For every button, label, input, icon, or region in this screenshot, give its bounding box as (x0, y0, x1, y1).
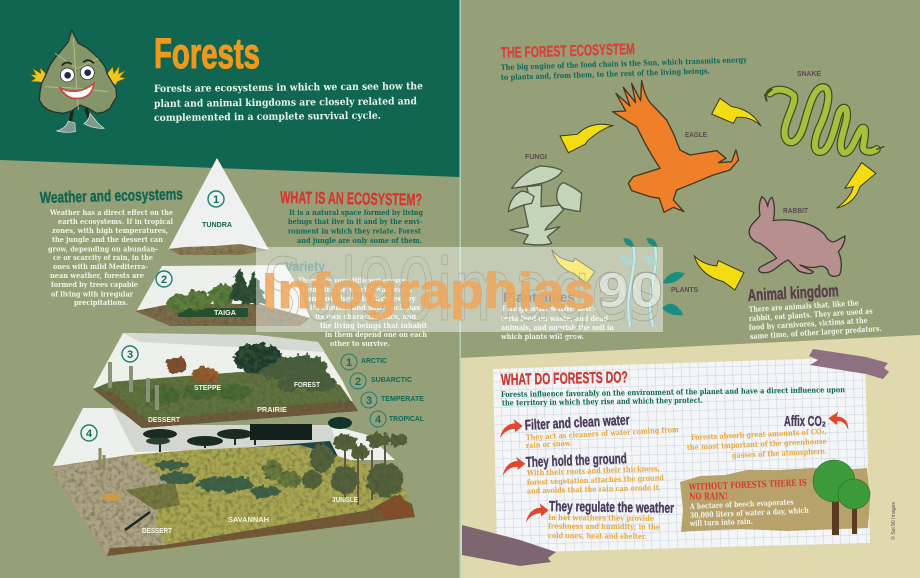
text block: animal kingdom: rabbit, eat plants. They are used as (749, 306, 873, 323)
intro text: complemented in a complete survival cycle. (154, 111, 381, 124)
photo credit: © Sol 90 Images (890, 501, 897, 540)
item: they hold the ground: They hold the ground (526, 451, 627, 471)
watermark overlay: 90 (597, 264, 663, 318)
callout: without forests there is no rain: WITHOUT FORESTS THERE IS (688, 478, 807, 493)
item: affix co2: Affix CO₂ (784, 414, 826, 430)
text block: variety (298, 276, 427, 348)
legend: climate zones: 3 (366, 395, 372, 407)
callout: without forests there is no rain: NO RAIN! (689, 492, 728, 502)
text block: forests influence: the territory in which they rise and which they protect. (502, 396, 703, 407)
text block: variety: the living beings that inhabit (320, 321, 427, 330)
arrow: hold ground (503, 457, 525, 476)
pyramid layer 3: temperate (93, 333, 358, 428)
label eagle: EAGLE (685, 132, 707, 139)
biome labels layer 3: PRAIRIE (257, 407, 287, 414)
circled number 2 (156, 271, 172, 287)
heading: what do forests do: WHAT DO FORESTS DO? (501, 369, 628, 389)
item: filter and clean water: Filter and clean water (524, 413, 630, 434)
text block: food chain intro: The big engine of the food chain is the Sun, which transmits energy (501, 55, 747, 72)
text block: variety: in them depend one on each (325, 330, 427, 339)
legend: climate zones: SUBARCTIC (371, 377, 412, 384)
circled number 4: 4 (86, 428, 93, 440)
text block: weather: formed by trees capable (51, 280, 138, 289)
watermark overlay: Infographias (262, 263, 595, 319)
biome labels layer 4: DESSERT (142, 528, 173, 535)
arrow: eagle to fungi (560, 124, 613, 153)
heading: the forest ecosystem: THE FOREST ECOSYSTEM (501, 41, 635, 62)
arrow: snake to eagle (712, 98, 761, 126)
callout: without forests there is no rain: 30,000 liters of water a day, which (690, 506, 809, 520)
text block: animal kingdom: There are animals that, like the (749, 298, 859, 314)
panel: decomposers text (500, 289, 614, 341)
panel: what is an ecosystem (280, 188, 427, 348)
cream lower band of right page (460, 335, 920, 578)
item: affix co2: the most important of the greenhouse (687, 437, 827, 452)
circled number 4 (81, 425, 97, 441)
torn tape: top right (809, 349, 889, 379)
text block: weather: grow, depending on abundan- (48, 244, 158, 254)
biome labels layer 3: DESSERT (148, 417, 181, 424)
legend: climate zones: 1 (346, 357, 352, 369)
page fold line (460, 0, 461, 578)
text block: weather: precipitations. (74, 298, 128, 307)
icon: trees (813, 460, 870, 535)
text block: variety: other to survive. (330, 339, 390, 348)
text block: ecosystem definition: beings that live in it and by the envi- (288, 217, 422, 226)
legend: climate zones: 2 (355, 376, 361, 388)
text block: food chain intro: to plants and, from them, to the rest of the living beings. (501, 66, 710, 82)
text block: forests influence: Forests influence favorably on the environment of the planet and have a direct influence upon (501, 385, 845, 399)
item: affix co2 (687, 414, 827, 460)
item: they hold the ground: and avoids that the rain can erode it. (527, 483, 661, 495)
item: they regulate the weather (548, 499, 674, 541)
text block: weather: nean weather, forests are (50, 271, 144, 280)
text block: decomposers (500, 304, 614, 341)
icon: rabbit (749, 197, 845, 276)
text block: animal kingdom: same time, of other larger predators. (750, 324, 882, 341)
legend: climate zones: TROPICAL (389, 416, 425, 423)
text block: ecosystem definition (288, 208, 424, 245)
heading: weather and ecosystems: Weather and ecosystems (40, 186, 183, 207)
item: they regulate the weather: They regulate the weather (549, 499, 674, 517)
pyramid layer 4: tropical (50, 408, 415, 556)
icon: eagle (613, 81, 739, 212)
intro text: Forests are ecosystems in which we can see how the (154, 81, 423, 95)
icon: plants (619, 238, 698, 327)
text block: ecosystem definition: ronment in which they relate. Forest (288, 226, 421, 236)
arrow: fungi to plants (552, 249, 595, 283)
text block: weather: zones, with high temperatures, (52, 226, 168, 235)
text block: weather: Weather has a direct effect on the (49, 208, 173, 217)
label taiga: TAIGA (214, 310, 236, 317)
callout: without forests there is no rain (680, 468, 870, 532)
text block: ecosystem definition: and jungle are only some of them. (297, 236, 422, 245)
intro text: plant and animal kingdoms are closely related and (154, 96, 417, 110)
arrow: filter water (500, 419, 523, 438)
text block: weather: ce or scarcity of rain, in the (53, 253, 153, 262)
icon: snake (765, 71, 884, 153)
text block: weather: ones with mild Mediterra- (53, 262, 148, 271)
text block: animal kingdom (749, 298, 882, 341)
text block: weather: earth ecosystems. If in tropical (58, 217, 173, 226)
item: they hold the ground: With their roots and their thickness, (526, 464, 660, 478)
panel: what do forests do (462, 349, 889, 566)
heading: decomposers: Plant allies (503, 289, 575, 305)
label plants: PLANTS (671, 287, 698, 294)
green header band (0, 0, 460, 177)
arrow: plants to rabbit (694, 256, 744, 290)
legend: climate zones (341, 354, 425, 427)
text block: variety: tems in the world, and each (302, 285, 412, 294)
icon: leaf mascot (30, 30, 126, 132)
callout: without forests there is no rain: A hectare of beech evaporates (689, 497, 794, 511)
text block: ecosystem definition: It is a natural space formed by living (289, 208, 424, 217)
biome labels layer 3: FOREST (294, 382, 321, 389)
legend: climate zones: TEMPERATE (381, 396, 424, 403)
circled number 3 (122, 346, 138, 362)
pyramid layer 1: tundra (168, 158, 269, 255)
biome labels layer 3 (148, 382, 321, 424)
item: filter and clean water: They act as cleaners of water coming from (526, 425, 679, 442)
circled number 3: 3 (127, 349, 133, 361)
label tundra: TUNDRA (202, 222, 232, 229)
text block: decomposers: which plants will grow. (500, 332, 584, 341)
text block: variety: its climate and soil. Each has (310, 303, 420, 312)
torn tape: bottom left (462, 525, 556, 566)
circled number 2: 2 (161, 274, 167, 286)
arrow: affix co2 (828, 412, 848, 430)
item: they hold the ground: forest vegetation attaches the ground (527, 473, 665, 487)
pyramid layer 2: taiga (135, 265, 310, 326)
item: they regulate the weather: cold ones, heat and shelter. (548, 531, 647, 541)
icon: fungi (508, 154, 582, 245)
text block: decomposers: Fungi and some bac- (501, 304, 597, 313)
watermark overlay: Sol90images (263, 241, 661, 341)
item: filter and clean water: rain or snow. (526, 439, 572, 450)
item: affix co2: gasses of the atmosphere. (732, 447, 827, 460)
heading: variety: Variety (285, 258, 325, 274)
item: they regulate the weather: In hot weathers they provide (548, 513, 654, 523)
item: they regulate the weather: freshness and humidity; in the (548, 522, 660, 531)
text block: variety: one of them is formed by (306, 294, 417, 303)
text block: variety: There are very different ecosys- (298, 276, 408, 285)
text block: forests influence (501, 385, 845, 407)
item: filter and clean water (524, 413, 679, 450)
legend: climate zones: 4 (375, 414, 382, 426)
circled number 1: 1 (213, 194, 219, 206)
item: they hold the ground (526, 451, 665, 495)
panel: weather and ecosystems (40, 186, 183, 307)
item: affix co2: Forests absorb great amounts of CO₂, (691, 427, 827, 442)
text block: weather: of living with irregular (51, 290, 134, 298)
title: Forests (154, 30, 260, 78)
arrow: rabbit to snake (837, 163, 876, 208)
legend: climate zones: ARCTIC (361, 358, 387, 365)
text block: animal kingdom: food by carnivores, victims at the (749, 316, 868, 332)
text block: weather (48, 208, 173, 307)
label fungi: FUNGI (525, 154, 547, 161)
heading: animal kingdom: Animal kingdom (747, 281, 839, 305)
panel: animal kingdom (747, 281, 882, 341)
intro text (154, 81, 423, 124)
biome labels layer 3: STEPPE (194, 385, 221, 392)
biome labels layer 4 (142, 497, 358, 535)
text block: decomposers: animals, and nourish the soil in (501, 323, 614, 332)
text block: variety: its own characteristics, and (315, 312, 417, 321)
text block: decomposers: teria feed on waste, and dead (501, 314, 609, 323)
label rabbit: RABBIT (783, 208, 809, 215)
notebook paper (493, 357, 870, 553)
text block: weather: the jungle and the dessert can (52, 235, 163, 244)
callout: without forests there is no rain: will turn into rain. (689, 517, 753, 528)
heading: what is an ecosystem: WHAT IS AN ECOSYSTEM? (280, 188, 422, 209)
diagram: food chain (508, 71, 884, 327)
biome labels layer 4: SAVANNAH (228, 517, 269, 524)
arrow: regulate weather (526, 503, 549, 523)
label snake: SNAKE (797, 71, 821, 78)
biome labels layer 4: JUNGLE (332, 497, 358, 504)
text block: food chain intro (501, 55, 747, 82)
